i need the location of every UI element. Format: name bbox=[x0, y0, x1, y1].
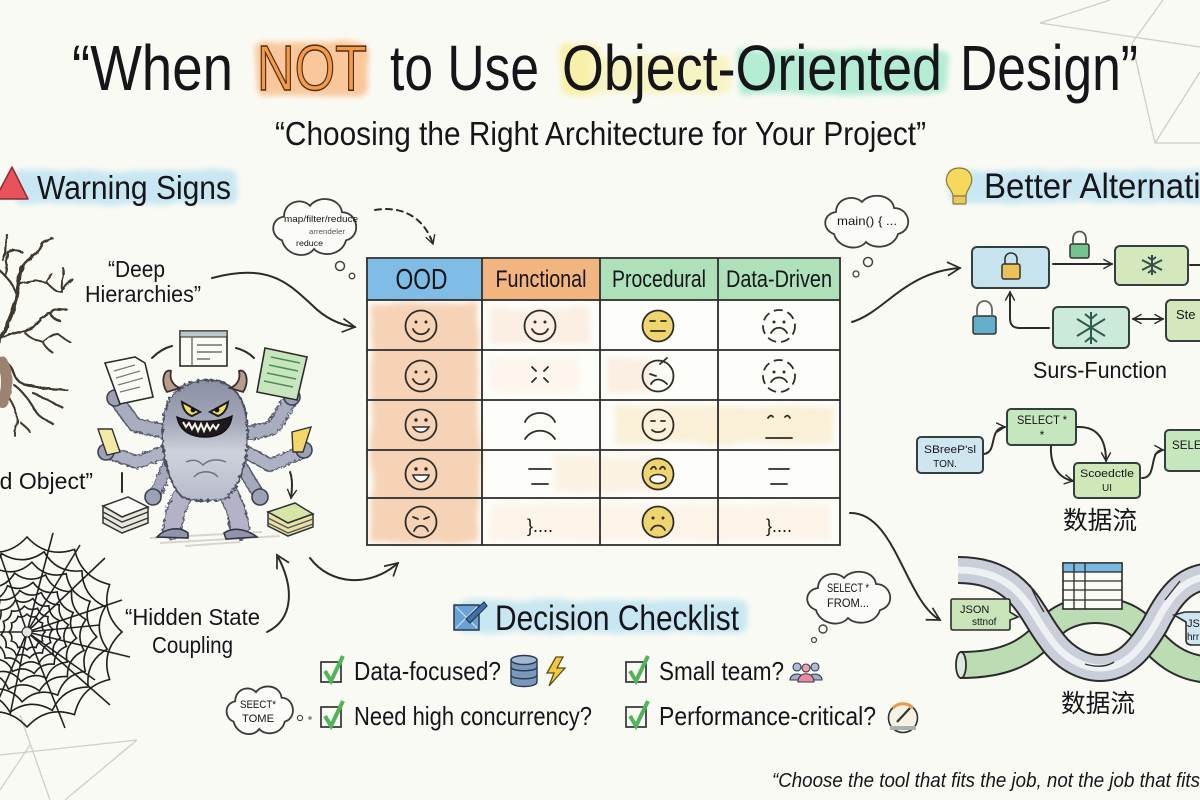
icon: notepad check bbox=[454, 602, 487, 630]
double arrow bbox=[1133, 318, 1163, 320]
box middle: UI bbox=[1102, 483, 1112, 494]
item: data-focused bbox=[321, 656, 565, 686]
arrow: table to pipeline bbox=[850, 513, 940, 620]
connector off canvas bbox=[1190, 264, 1200, 266]
decoration: web sketch bottom left bbox=[0, 715, 137, 800]
lock blue bbox=[973, 301, 996, 334]
item: data-focused: Data-focused? bbox=[354, 656, 501, 686]
box ste bbox=[1166, 300, 1200, 341]
box select bbox=[1007, 409, 1076, 445]
subtitle: “Choosing the Right Architecture for Your Project” bbox=[275, 115, 926, 152]
comparison table bbox=[367, 258, 840, 545]
monster horns bbox=[163, 371, 247, 392]
box select: * bbox=[1040, 428, 1045, 442]
arrow: curve to table bbox=[310, 558, 398, 580]
thought bubble: map filter reduce: map/filter/reduce bbox=[284, 214, 358, 225]
label: hidden state coupling: “Hidden State bbox=[125, 604, 260, 630]
title bbox=[72, 32, 1138, 104]
decoration: web sketch top right bbox=[1040, 0, 1200, 143]
label: deep hierarchies: Hierarchies” bbox=[85, 281, 201, 307]
monster feet bbox=[157, 529, 257, 539]
box left: TON. bbox=[933, 459, 957, 470]
panel: better alternatives bbox=[917, 167, 1200, 718]
thought bubble: select from: SELECT * bbox=[827, 581, 869, 595]
callout: JSON left bbox=[951, 599, 1018, 630]
header: Functional bbox=[483, 259, 599, 300]
item: small team: Small team? bbox=[659, 656, 784, 686]
label: deep hierarchies bbox=[85, 256, 201, 307]
icon: light bulb bbox=[946, 168, 972, 204]
table icon bbox=[1063, 563, 1122, 609]
faces Functional column: }.... bbox=[527, 516, 553, 536]
thought bubble: map filter reduce bbox=[273, 199, 358, 279]
box middle bbox=[1074, 463, 1140, 498]
monster body bbox=[162, 380, 248, 501]
document right green bbox=[257, 348, 307, 400]
item: performance-critical: Performance-critical? bbox=[659, 701, 876, 731]
title: NOT bbox=[257, 32, 367, 104]
thought bubble: select tome: SEECT* bbox=[240, 699, 277, 711]
heading: warning signs: Warning Signs bbox=[37, 169, 231, 206]
label: deep hierarchies: “Deep bbox=[108, 256, 165, 282]
thought bubble: select tome: TOME bbox=[242, 713, 274, 725]
header: Procedural bbox=[601, 259, 717, 300]
arrow: dashed to table bbox=[375, 209, 433, 244]
icon: people bbox=[790, 663, 822, 682]
box right bbox=[1165, 430, 1200, 471]
thought bubble: select from bbox=[807, 572, 890, 642]
motion marks bbox=[152, 346, 254, 358]
down arrows bbox=[122, 472, 292, 498]
box with lock bbox=[972, 247, 1049, 288]
paper stack right bbox=[268, 503, 313, 536]
monster mouth bbox=[177, 416, 232, 437]
header: Data-Driven bbox=[719, 259, 839, 300]
box ste: Ste bbox=[1176, 307, 1196, 322]
icon: lightning bbox=[547, 657, 565, 686]
monster chest marks bbox=[186, 460, 226, 477]
table grid bbox=[367, 258, 840, 545]
callout: JSON right bbox=[1174, 612, 1200, 645]
title: Design” bbox=[960, 32, 1138, 104]
label: surs-function: Surs-Function bbox=[1033, 357, 1167, 383]
box with big snowflake bbox=[1053, 307, 1129, 348]
label: hidden state coupling bbox=[125, 604, 260, 658]
note left bbox=[98, 429, 120, 455]
header: OOD bbox=[368, 259, 481, 300]
panel: warning signs bbox=[0, 167, 313, 729]
table backgrounds bbox=[367, 258, 840, 545]
thought bubble: map filter reduce: reduce bbox=[296, 239, 324, 248]
callout: JSON left: sttnof bbox=[972, 617, 997, 628]
note right bbox=[292, 427, 311, 452]
icon: database bbox=[511, 656, 537, 686]
arrow: hidden state to monster bbox=[267, 555, 289, 632]
heading: decision checklist: Decision Checklist bbox=[495, 599, 739, 638]
pipe green bbox=[956, 610, 1200, 678]
header: Data-Driven: Data-Driven bbox=[726, 266, 832, 293]
icon: gauge bbox=[888, 704, 918, 732]
arrow: deep hierarchies to table bbox=[212, 273, 355, 327]
title: to Use bbox=[390, 32, 539, 104]
monster hands bbox=[98, 389, 312, 505]
header: Procedural: Procedural bbox=[612, 266, 706, 293]
header: Functional: Functional bbox=[496, 266, 586, 293]
faces Data-Driven column: }.... bbox=[766, 516, 792, 536]
box middle: Scoedctle bbox=[1080, 468, 1134, 480]
thought bubble: select tome bbox=[227, 686, 312, 734]
title: Object-Oriented bbox=[562, 32, 942, 104]
diagram: pipeline bbox=[951, 563, 1200, 718]
ground shadow bbox=[150, 532, 280, 546]
faces Functional column bbox=[524, 310, 556, 536]
header: OOD: OOD bbox=[396, 264, 448, 296]
icon: spider web bbox=[0, 533, 130, 729]
callout: JSON right: hrr bbox=[1187, 632, 1200, 643]
faces OOD column bbox=[406, 310, 436, 538]
document left bbox=[105, 357, 153, 404]
box select: SELECT * bbox=[1017, 413, 1067, 427]
arrow box to box bbox=[1053, 263, 1112, 265]
diagram: pure functions bbox=[972, 232, 1200, 383]
arrow back to box bbox=[1010, 292, 1049, 328]
item: need high concurrency: Need high concurrency? bbox=[354, 701, 592, 731]
thought bubble: main: main() { ... bbox=[837, 214, 897, 228]
callout: JSON left: JSON bbox=[960, 604, 989, 616]
icon: dead tree bbox=[0, 235, 73, 436]
pipe grey bbox=[958, 570, 1200, 668]
box left: SBreeP'sl bbox=[924, 444, 976, 456]
illustration: god object monster bbox=[98, 331, 313, 546]
lock green bbox=[1070, 232, 1089, 258]
monster teeth bbox=[183, 422, 219, 431]
monster brows and eyes bbox=[182, 402, 228, 416]
label: hidden state coupling: Coupling bbox=[152, 632, 233, 658]
arrow: table to better alternatives bbox=[852, 268, 960, 322]
flow arrows bbox=[984, 427, 1163, 481]
paper stack left bbox=[103, 497, 148, 533]
label: data flow 2: 数据流 bbox=[1061, 690, 1135, 718]
diagram: data flow bbox=[917, 409, 1200, 535]
thought bubble: select from: FROM... bbox=[827, 596, 869, 610]
panel: decision checklist bbox=[321, 599, 918, 732]
title: “When bbox=[72, 32, 233, 104]
callout: JSON right: JS bbox=[1187, 618, 1200, 630]
window top bbox=[180, 331, 227, 366]
thought bubble: map filter reduce: arrendeler bbox=[309, 229, 346, 236]
box left bbox=[917, 437, 983, 473]
faces Data-Driven column bbox=[763, 310, 795, 536]
box with small snowflake bbox=[1115, 246, 1188, 285]
thought bubble: main bbox=[825, 196, 908, 277]
faces Procedural column bbox=[642, 310, 674, 538]
monster limbs bbox=[110, 400, 300, 530]
label: data flow: 数据流 bbox=[1063, 507, 1137, 535]
